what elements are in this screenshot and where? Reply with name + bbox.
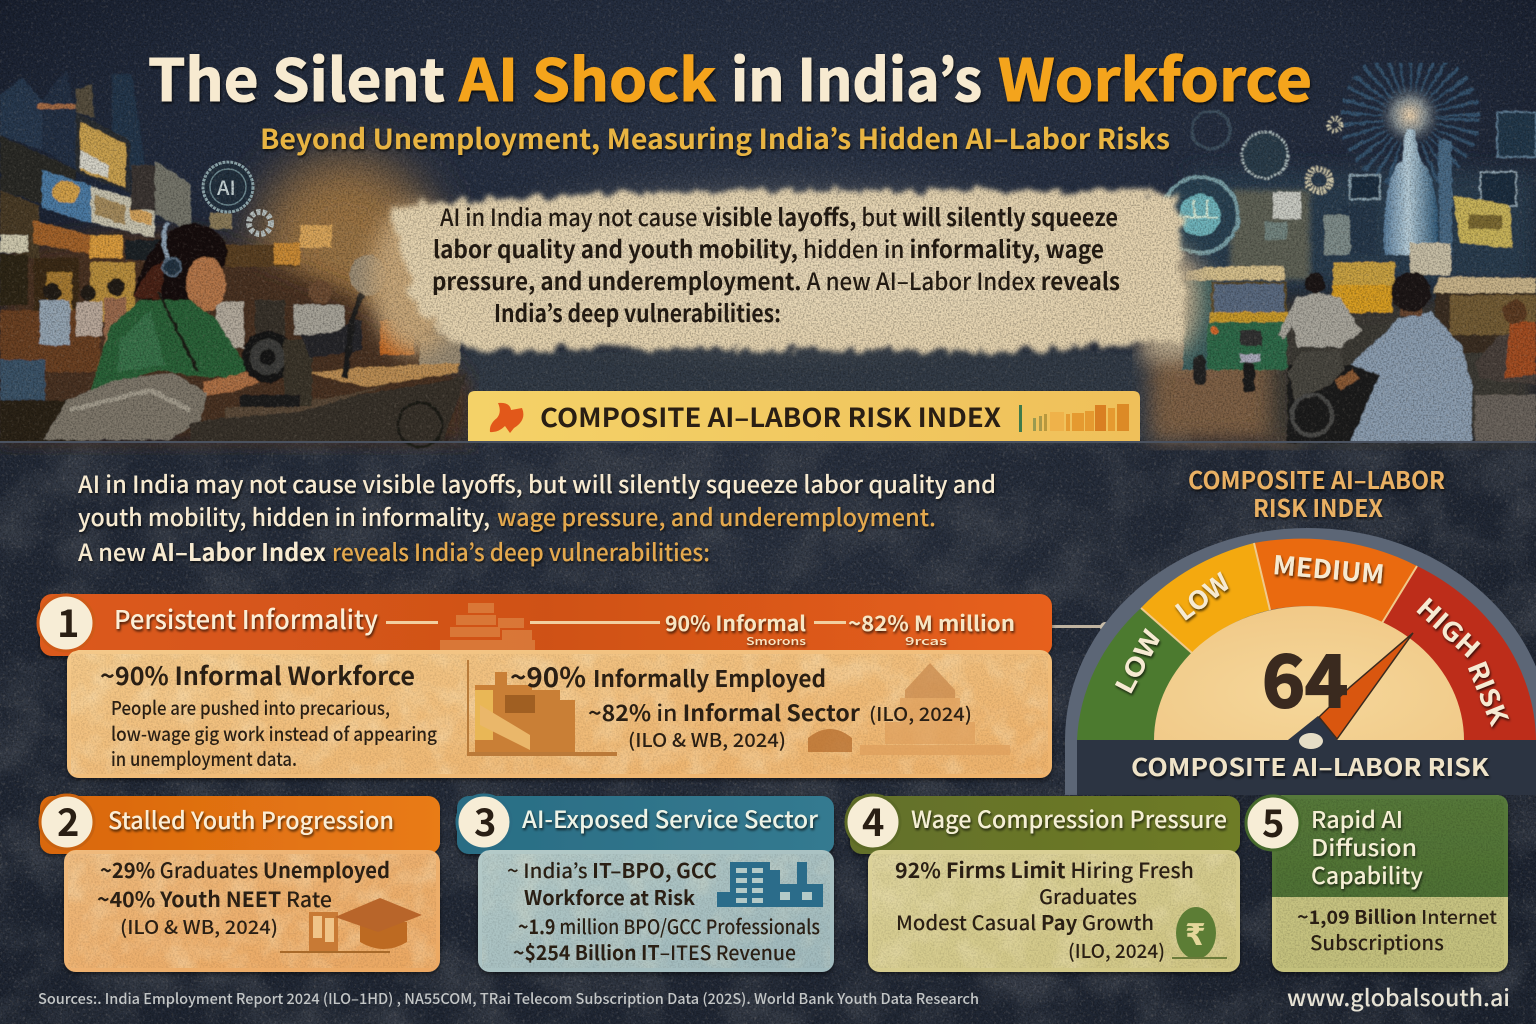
gauge value: 64 (1262, 623, 1348, 728)
parchment patch (390, 190, 1185, 352)
website: www.globalsouth.ai (1287, 979, 1510, 1013)
card 3: AI-exposed service sector: ~$254 Billion IT–ITES Revenue (513, 937, 796, 966)
stall fabric and bystanders (0, 310, 100, 372)
card 1: persistent informality: in unemployment data. (111, 745, 297, 772)
index banner: COMPOSITE AI–LABOR RISK INDEX (540, 398, 1001, 435)
hero intro text: India’s deep vulnerabilities: (494, 294, 781, 329)
poster blue (42, 170, 91, 224)
lead paragraph: reveals India’s deep vulnerabilities: (332, 533, 710, 568)
gauge centre dial (1154, 606, 1464, 740)
glowing tower (1384, 130, 1438, 255)
card 1: persistent informality: 9rcas (905, 633, 947, 649)
card 5: rapid AI diffusion capability: Subscriptions (1310, 927, 1444, 956)
AI badge (203, 162, 253, 212)
gauge base panel (1077, 733, 1536, 795)
gauge labels (1105, 545, 1519, 730)
card 2: stalled youth progression: Stalled Youth Progression (108, 801, 394, 836)
card 1: persistent informality: low-wage gig work instead of appearing (111, 720, 437, 747)
gauge labels: LOW (1105, 623, 1169, 700)
gauge labels: RISK (1460, 655, 1519, 730)
card 1: persistent informality: (ILO & WB, 2024) (628, 726, 786, 753)
radial burst (1362, 70, 1458, 166)
card 4: wage compression pressure: 4 (862, 792, 884, 847)
auto rickshaw (1183, 266, 1288, 392)
AI badge: AI (217, 172, 236, 201)
lead paragraph: youth mobility, hidden in informality, (78, 498, 490, 533)
hero intro text: AI in India may not cause visible layoffs, but will silently squeeze (440, 198, 1118, 233)
poster white (91, 186, 155, 238)
card 1: persistent informality: Informally Employed (593, 660, 826, 694)
worker woman (90, 223, 260, 396)
rider (1278, 273, 1383, 443)
icon: rupee coin (1172, 907, 1227, 959)
card 2: stalled youth progression: ~40% Youth NEET Rate (97, 884, 332, 914)
card 1: persistent informality: ~90% Informal Workforce (100, 657, 415, 693)
lead paragraph: wage pressure, and underemployment. (497, 498, 936, 533)
index banner (468, 391, 1140, 442)
foreground man (1335, 272, 1472, 442)
section line under hero (0, 441, 1536, 443)
right tuktuk and man (1433, 277, 1536, 442)
gauge labels: HIGH (1409, 588, 1489, 665)
table (190, 373, 467, 442)
gauge labels: MEDIUM (1271, 545, 1386, 592)
card 3: AI-exposed service sector: AI-Exposed Service Sector (522, 800, 818, 835)
gauge heading: RISK INDEX (1253, 489, 1383, 524)
gauge heading (1188, 461, 1445, 524)
connector from card 1 to gauge (1052, 622, 1110, 632)
risk gauge (1065, 528, 1536, 795)
card 1: persistent informality: Smorons (746, 633, 806, 649)
market illustration left (0, 70, 470, 447)
icon: graduation cap and book (280, 898, 422, 953)
shop signs (33, 220, 90, 254)
warm dust at parchment edges (370, 205, 1200, 355)
card 3: AI-exposed service sector (457, 792, 834, 972)
gauge segment: high red (1382, 566, 1536, 740)
title: Workforce (998, 34, 1312, 118)
lead paragraph: A new (78, 533, 146, 568)
skyline (0, 70, 146, 170)
card 1: persistent informality: ~82% M million (848, 608, 1015, 638)
gauge segment: medium orange (1254, 539, 1417, 623)
posters (1453, 195, 1513, 248)
card 3: AI-exposed service sector: Workforce at Risk (524, 882, 695, 911)
card 4: wage compression pressure (846, 792, 1240, 972)
card 1: persistent informality: ~90% (510, 656, 586, 695)
lead paragraph: AI–Labor Index (151, 533, 326, 568)
card 2: stalled youth progression: (ILO & WB, 2024) (120, 913, 278, 940)
gauge base panel: COMPOSITE AI–LABOR RISK (1131, 748, 1490, 783)
card 1: persistent informality: People are pushed into precarious, (111, 694, 390, 721)
card 3: AI-exposed service sector: ~ India’s IT–BPO, GCC (507, 855, 717, 884)
card 3: AI-exposed service sector: 3 (474, 792, 496, 847)
poster gold (76, 112, 130, 193)
icon: rupee coin: ₹ (1185, 910, 1206, 954)
gear icon (249, 212, 271, 234)
card 4: wage compression pressure: Graduates (1039, 881, 1137, 910)
card 1 brick texture (440, 603, 535, 650)
hero intro text: labor quality and youth mobility, hidden in informality, wage (433, 230, 1104, 265)
hero intro text: pressure, and underemployment. A new AI–Labor Index reveals (432, 262, 1120, 297)
card 1: persistent informality: ~82% in Informal Sector (588, 696, 860, 728)
banner mini bars (1033, 404, 1129, 431)
card 5: rapid AI diffusion capability: Rapid AI (1311, 801, 1403, 835)
poster grey (154, 160, 191, 232)
card 4: wage compression pressure: Wage Compression Pressure (911, 800, 1227, 835)
card 4: wage compression pressure: 92% Firms Limit Hiring Fresh (895, 855, 1194, 885)
lead paragraph: AI in India may not cause visible layoffs, but will silently squeeze labor quality and (78, 465, 996, 500)
title: AI Shock (458, 34, 716, 118)
card 5: rapid AI diffusion capability: Capability (1311, 857, 1423, 891)
card 1 illustration: buildings (467, 672, 617, 756)
card 3: AI-exposed service sector: ~1.9 million BPO/GCC Professionals (518, 911, 820, 940)
cloth bundle (43, 373, 207, 440)
banner icon (490, 403, 523, 433)
card 1: persistent informality: (ILO, 2024) (869, 700, 972, 727)
card 5: rapid AI diffusion capability: ~1,09 Billion Internet (1297, 903, 1497, 930)
hero intro text (432, 198, 1120, 329)
card 5: rapid AI diffusion capability (1246, 793, 1508, 972)
gauge needle (1288, 633, 1413, 740)
card 2: stalled youth progression: 2 (57, 792, 79, 847)
card 4: wage compression pressure: Modest Casual Pay Growth (896, 907, 1154, 936)
title: The Silent (148, 34, 445, 118)
card 1 illustration: tower (808, 663, 1010, 755)
title: in India’s (731, 34, 982, 118)
lead paragraph (78, 465, 996, 568)
gauge segment: low amber (1141, 543, 1270, 653)
card 1: persistent informality (38, 593, 1052, 778)
title (148, 34, 1312, 118)
card 4: wage compression pressure: (ILO, 2024) (1068, 937, 1165, 964)
gauge heading: COMPOSITE AI–LABOR (1188, 461, 1445, 496)
card 2: stalled youth progression: ~29% Graduates Unemployed (100, 855, 390, 885)
sources: Sources:. India Employment Report 2024 (ILO–1HD) , NA55COM, TRai Telecom Subscription Data (202S). World Bank Youth Data Research (38, 988, 979, 1009)
sewing machine (240, 255, 386, 407)
card 1: persistent informality: 1 (57, 593, 79, 648)
gauge labels: LOW (1167, 563, 1237, 628)
hero scene (0, 0, 1536, 447)
card 5: rapid AI diffusion capability: 5 (1262, 793, 1284, 848)
card 5: rapid AI diffusion capability: Diffusion (1311, 829, 1417, 863)
lower dark stall rows (0, 135, 76, 215)
street illustration right (1140, 70, 1536, 443)
card 1: persistent informality: Persistent Informality (114, 600, 378, 637)
card 2: stalled youth progression (40, 792, 440, 972)
gauge segment: low green (1077, 608, 1192, 740)
icon: office buildings (717, 862, 823, 907)
subtitle: Beyond Unemployment, Measuring India’s Hidden AI–Labor Risks (260, 118, 1170, 158)
card 1: persistent informality: 90% Informal (665, 608, 806, 638)
